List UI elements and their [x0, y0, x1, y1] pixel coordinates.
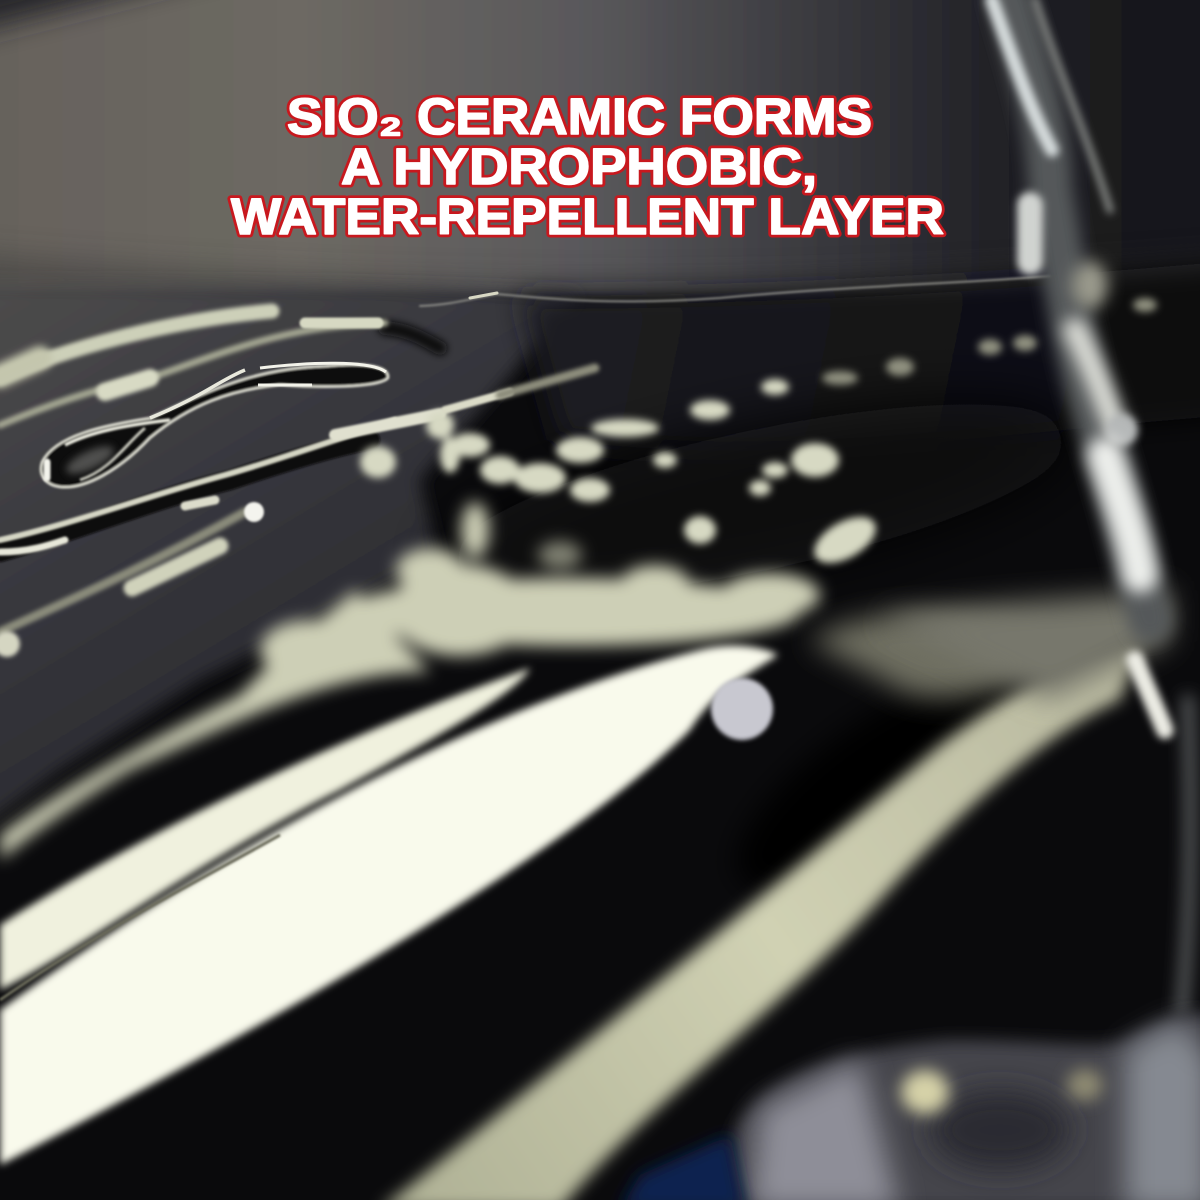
title line 2: A HYDROPHOBIC, — [341, 138, 817, 195]
long water rivulet to foam — [0, 368, 595, 552]
title line 3: WATER-REPELLENT LAYER — [231, 188, 944, 245]
foam: faint far droplets — [822, 298, 1157, 385]
blurred droplet highlight — [711, 678, 773, 740]
thin ripple line across the top of the water — [385, 276, 1050, 348]
title heavy white weight overlay — [231, 88, 944, 245]
lower left streaks — [0, 502, 264, 657]
foam: main blurred body — [0, 502, 820, 860]
bright main water bands — [0, 646, 778, 1165]
title line 1: SIO₂ CERAMIC FORMS — [287, 88, 872, 145]
title heavy white weight overlay: A HYDROPHOBIC, — [341, 138, 817, 195]
upper water streaks at left — [0, 311, 385, 425]
elongated water droplet — [41, 363, 388, 487]
title — [231, 88, 944, 245]
title heavy white weight overlay: WATER-REPELLENT LAYER — [231, 188, 944, 245]
foam: splash of droplets — [360, 379, 883, 573]
right long blurred streak — [380, 590, 1170, 1200]
falling water stream at right — [992, 0, 1190, 1010]
blurred bottle nozzle bottom right — [620, 1014, 1200, 1200]
title heavy white weight overlay: SIO₂ CERAMIC FORMS — [287, 88, 872, 145]
